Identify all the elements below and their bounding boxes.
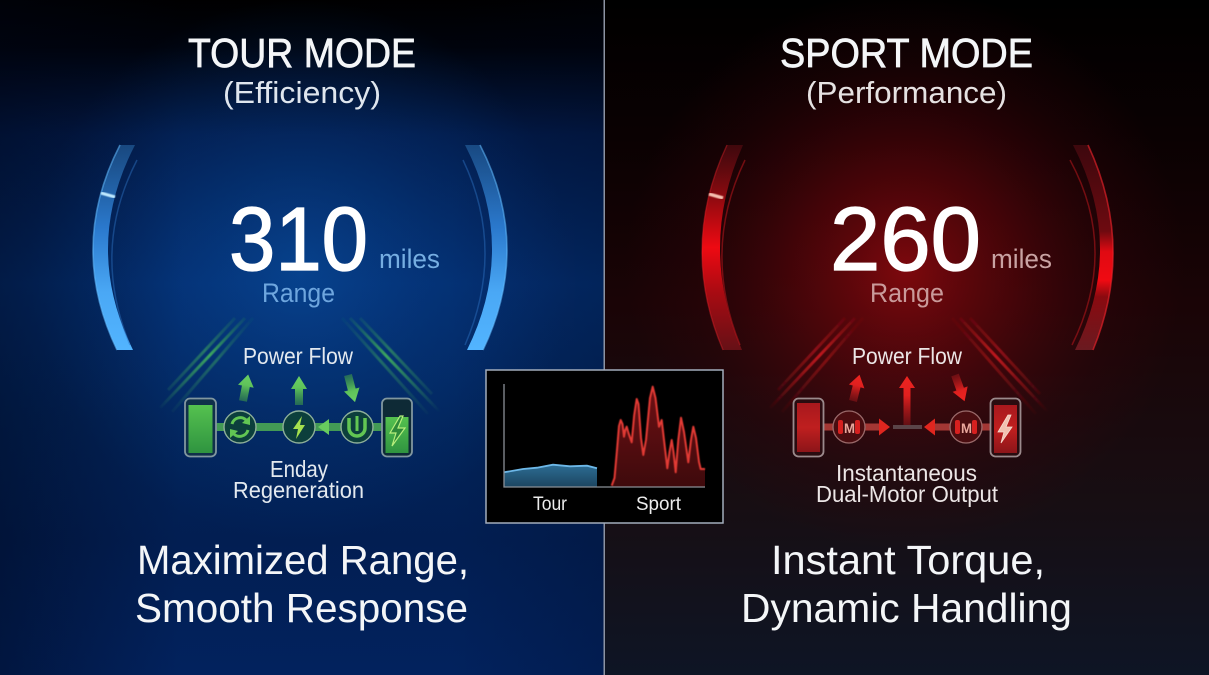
axis label: sport: Sport: [636, 494, 682, 515]
arrow: up left: [235, 373, 256, 403]
junction: [893, 425, 922, 429]
arrow: up left: [845, 373, 867, 403]
diagram: sport power flow: [794, 372, 1020, 456]
arrow: down right: [340, 373, 363, 404]
node: motor left: [833, 411, 865, 443]
panel: tour mode: [0, 0, 604, 675]
tagline: sport: Instant Torque,: [771, 537, 1045, 583]
range label: Range: [870, 278, 944, 308]
series: tour: [504, 465, 597, 487]
label: instantaneous dual-motor output: Instantaneous: [836, 460, 977, 486]
panel: sport mode: [604, 0, 1209, 675]
connector line: [216, 423, 382, 431]
gauge arc: left: [93, 145, 137, 350]
diagram: tour power flow: [185, 373, 412, 456]
gauge arc: right: [463, 145, 507, 350]
range value: 310: 310: [229, 190, 368, 290]
subheading: efficiency: (Efficiency): [223, 75, 381, 110]
range label: Range: [262, 278, 335, 308]
connector: left: [824, 424, 880, 430]
label: instantaneous dual-motor output: [816, 460, 999, 507]
label: enday regeneration: Regeneration: [233, 477, 364, 503]
tagline: tour: Maximized Range,: [137, 537, 469, 583]
node: motor right: M: [961, 420, 972, 436]
tagline: tour: Smooth Response: [135, 585, 468, 631]
node: regeneration cycle: [224, 411, 256, 443]
heading: tour mode: TOUR MODE: [188, 30, 416, 76]
range value: 260: 260: [830, 190, 981, 290]
battery: left: [794, 398, 824, 456]
gauge arc: right: [1070, 145, 1113, 350]
arrow: to center from right: [924, 418, 935, 436]
battery: right: [990, 398, 1020, 456]
node: motor left: M: [844, 420, 855, 436]
label: power flow: Power Flow: [852, 343, 962, 369]
range unit: miles: miles: [991, 244, 1052, 274]
arrow: down right: [947, 372, 972, 404]
arrow: into center node: [318, 419, 329, 435]
series: sport: [612, 387, 705, 487]
tagline: sport: Dynamic Handling: [741, 585, 1072, 631]
label: enday regeneration: [233, 456, 364, 503]
node: motor: [341, 411, 373, 443]
battery: right: [382, 398, 412, 456]
label: enday regeneration: Enday: [270, 456, 328, 482]
arrow: up center: [899, 376, 915, 425]
connector: right: [934, 424, 990, 430]
tagline: sport: [741, 537, 1072, 631]
node: lightning bolt: [283, 411, 315, 443]
gauge arc: left: [702, 145, 745, 350]
tagline: tour: [135, 537, 469, 631]
battery: left: [185, 398, 216, 456]
arrow: up center: [291, 376, 307, 405]
axis label: tour: Tour: [533, 494, 568, 515]
range unit: miles: miles: [379, 244, 440, 274]
perspective beams: [160, 318, 440, 414]
chart: tour vs sport power output: [486, 370, 723, 523]
label: power flow: Power Flow: [243, 343, 353, 369]
subheading: performance: (Performance): [806, 75, 1007, 110]
label: instantaneous dual-motor output: Dual-Motor Output: [816, 481, 999, 507]
perspective beams: [770, 318, 1048, 414]
heading: sport mode: SPORT MODE: [780, 30, 1033, 76]
node: motor right: [950, 411, 982, 443]
arrow: to center from left: [879, 418, 890, 436]
